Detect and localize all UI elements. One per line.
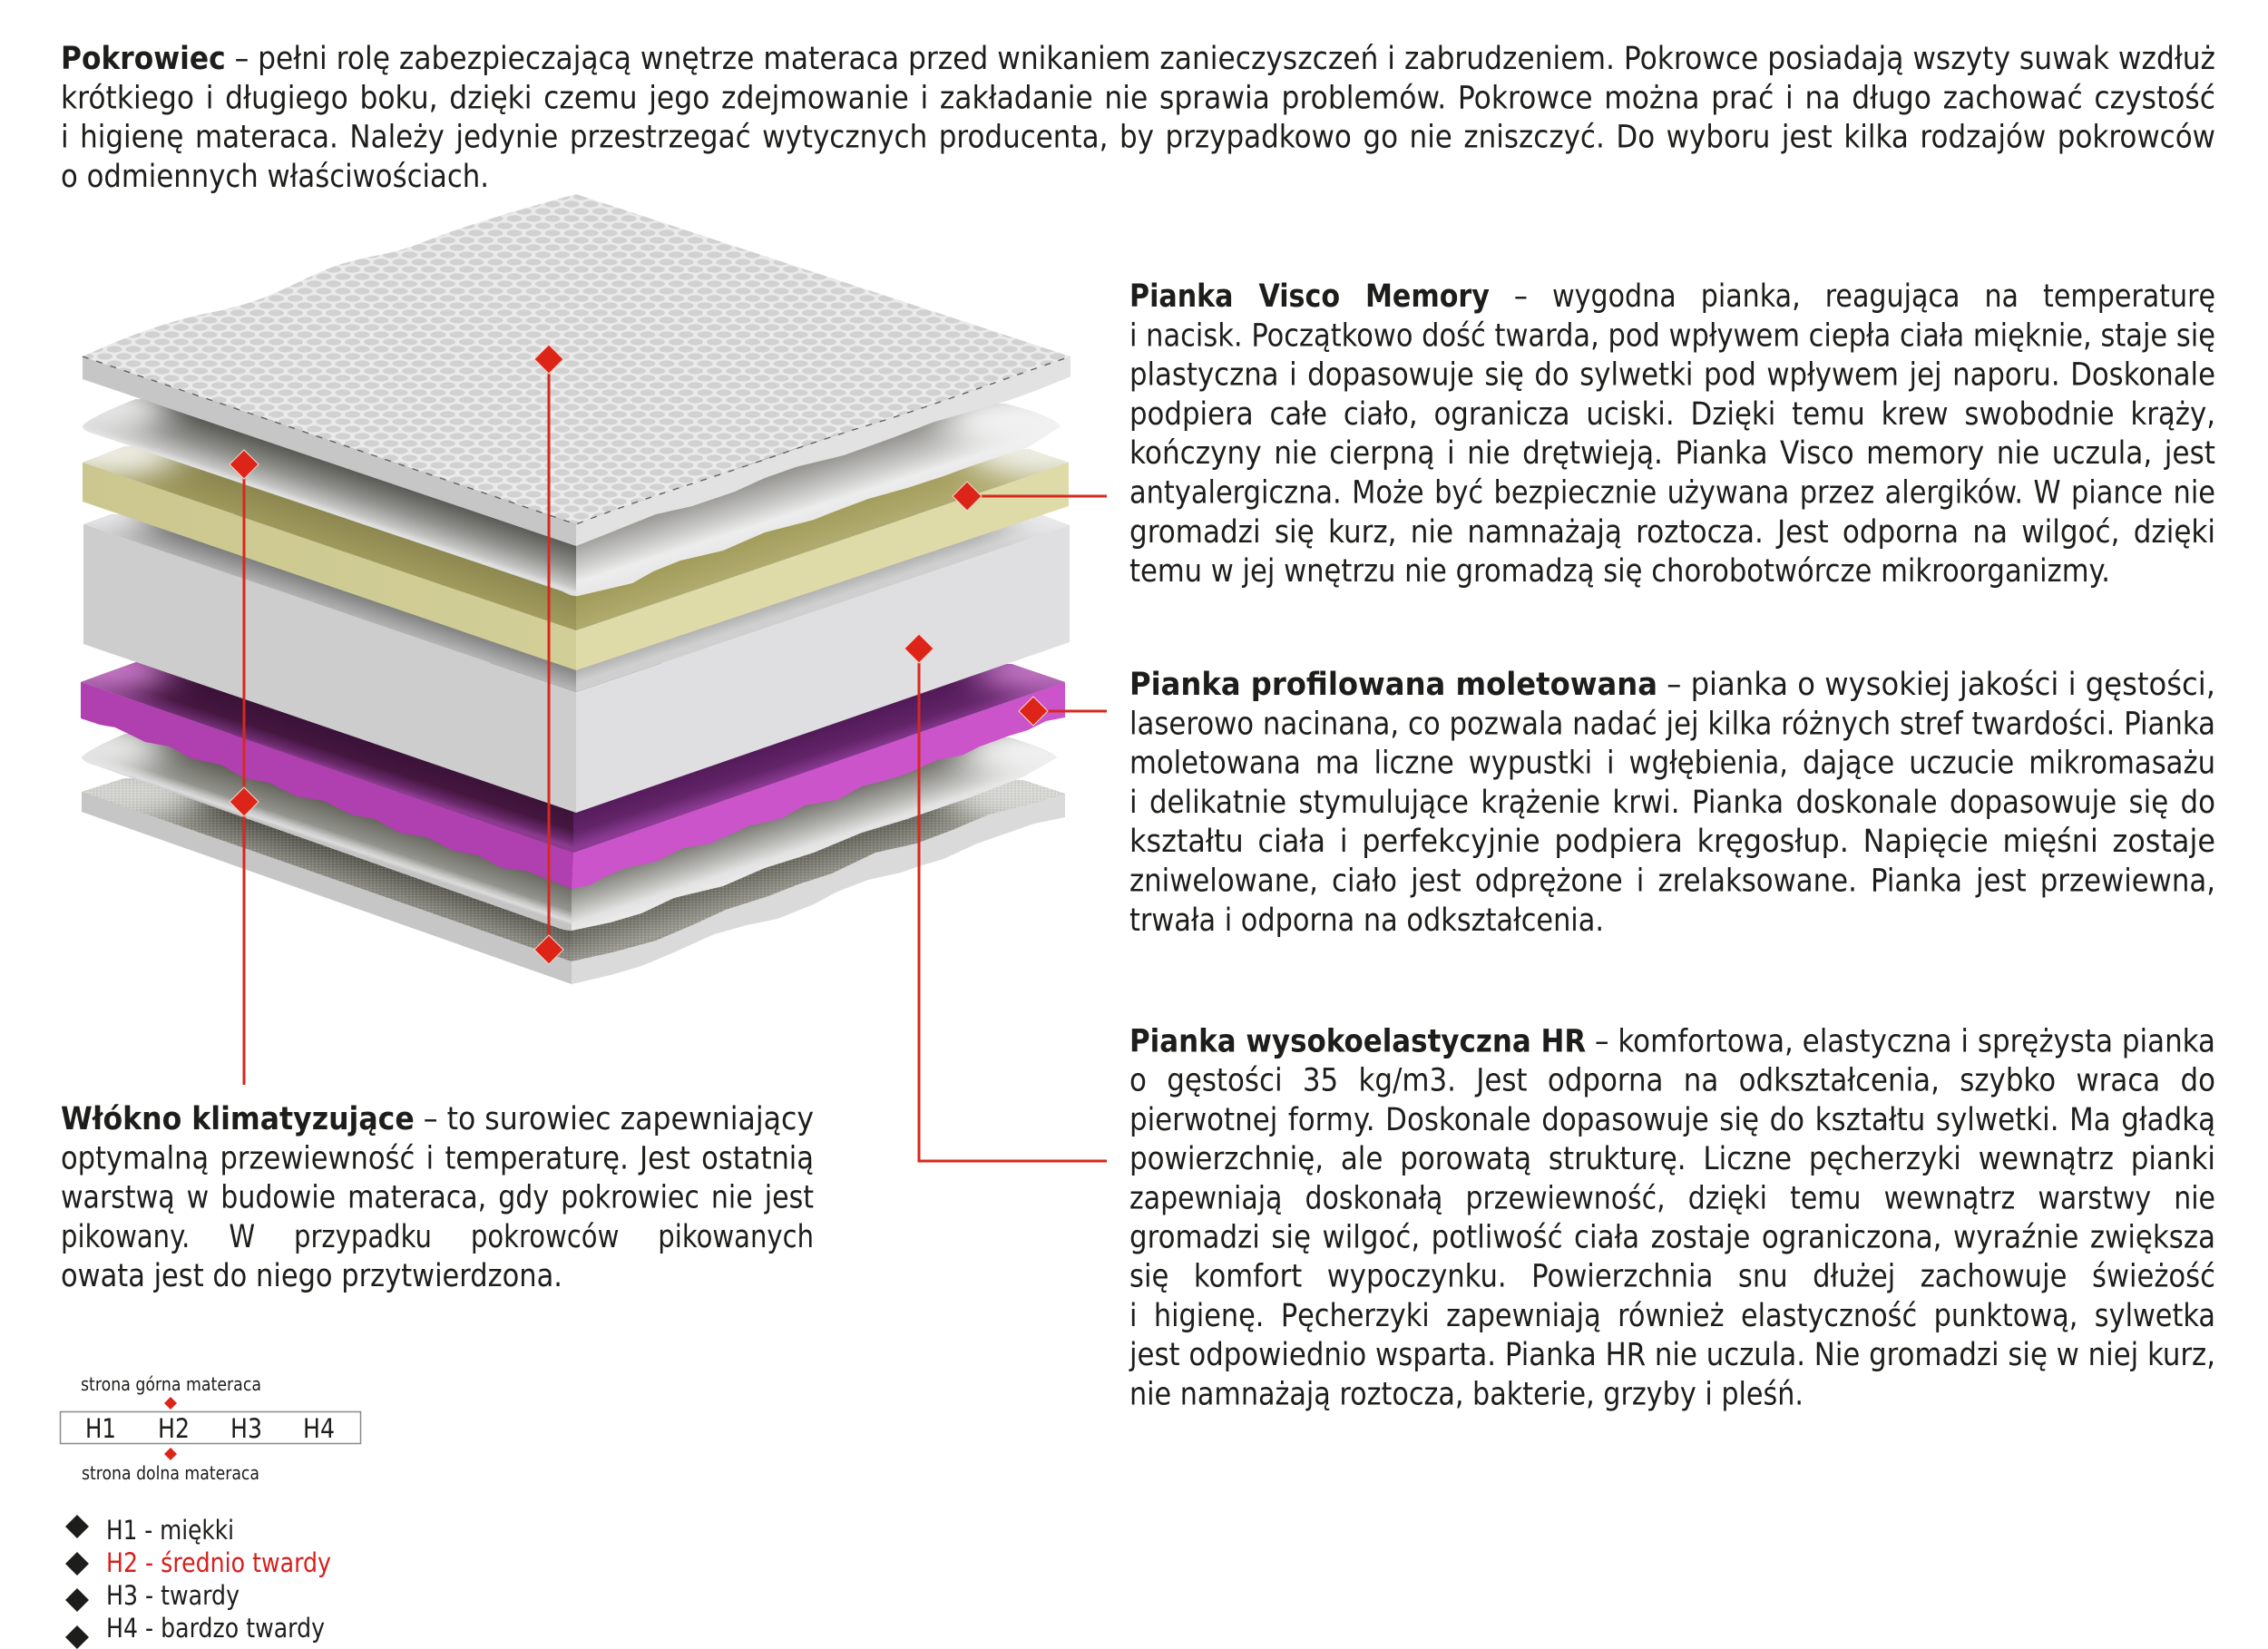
marker: top side firmness: [164, 1397, 177, 1410]
callout line: HR foam: [904, 634, 1107, 1161]
callout line: profiled foam: [1019, 697, 1107, 726]
text block: Pianka wysokoelastyczna HR: nie namnażają roztocza, bakterie, grzyby i pleśń.: [1129, 1376, 1804, 1412]
callout line: climate fibre: [230, 450, 259, 1085]
callout line: top cover to bottom: [534, 345, 563, 964]
legend item: H4: H4 - bardzo twardy: [106, 1613, 325, 1644]
legend item: H3: H3 - twardy: [106, 1580, 240, 1611]
firmness scale: [60, 1373, 361, 1484]
text block: Włókno klimatyzujące: owata jest do niego przytwierdzona.: [61, 1258, 562, 1294]
scale labels H1 to H4: H1: [85, 1413, 116, 1444]
label: top side: strona górna materaca: [81, 1373, 261, 1395]
text block: Pianka profilowana moletowana: Pianka profilowana moletowana – pianka o wysokiej jakości i gęstości,: [1129, 667, 2215, 703]
layer: grey HR foam block: [83, 514, 1070, 813]
callout line: Visco Memory: [953, 482, 1107, 511]
legend item: H4: [65, 1613, 325, 1649]
text block: Pokrowiec: [61, 41, 2215, 195]
label: bottom side: strona dolna materaca: [82, 1462, 259, 1484]
text block: Pianka Visco Memory: [1129, 278, 2215, 590]
layer: magenta profiled foam: [81, 662, 1065, 889]
text block: Pianka wysokoelastyczna HR: Pianka wysokoelastyczna HR – komfortowa, elastyczna i sprężysta pianka: [1129, 1023, 2215, 1059]
legend item: H3: [65, 1580, 240, 1612]
text block: Włókno klimatyzujące: Włókno klimatyzujące – to surowiec zapewniający: [61, 1101, 814, 1137]
scale labels H1 to H4: H2: [158, 1413, 190, 1444]
text block: Pianka Visco Memory: temu w jej wnętrzu nie gromadzą się chorobotwórcze mikroorganizmy.: [1129, 553, 2110, 590]
text block: Pianka wysokoelastyczna HR: [1129, 1023, 2215, 1412]
text block: Włókno klimatyzujące: [61, 1101, 814, 1294]
text block: Włókno klimatyzujące: warstwą w budowie materaca, gdy pokrowiec nie jest: [61, 1180, 814, 1216]
firmness legend: [65, 1515, 331, 1649]
mattress layer diagram: [81, 194, 1070, 984]
text block: Włókno klimatyzujące: pikowany. W przypadku pokrowców pikowanych: [61, 1219, 814, 1255]
text block: Pianka profilowana moletowana: [1129, 667, 2215, 939]
scale labels H1 to H4: [85, 1413, 335, 1444]
legend item: H1: [65, 1515, 234, 1546]
scale labels H1 to H4: H3: [230, 1413, 262, 1444]
text block: Pokrowiec: o odmiennych właściwościach.: [61, 159, 489, 195]
scale labels H1 to H4: H4: [303, 1413, 335, 1444]
text block: Włókno klimatyzujące: optymalną przewiewność i temperaturę. Jest ostatnią: [61, 1140, 814, 1176]
layer: upper white sheet: [83, 399, 1061, 597]
layer: bottom climate fibre plate: [82, 778, 1065, 984]
layer: lower white sheet: [82, 734, 1057, 931]
legend item: H2: H2 - średnio twardy: [106, 1547, 331, 1578]
layer: quilted top cover: [83, 194, 1070, 546]
layer: yellow visco memory foam: [83, 446, 1069, 670]
legend item: H1: H1 - miękki: [106, 1515, 234, 1546]
scale box: [60, 1411, 361, 1444]
marker: bottom side firmness: [164, 1448, 177, 1460]
text block: Pianka profilowana moletowana: trwała i odporna na odkształcenia.: [1129, 903, 1604, 939]
